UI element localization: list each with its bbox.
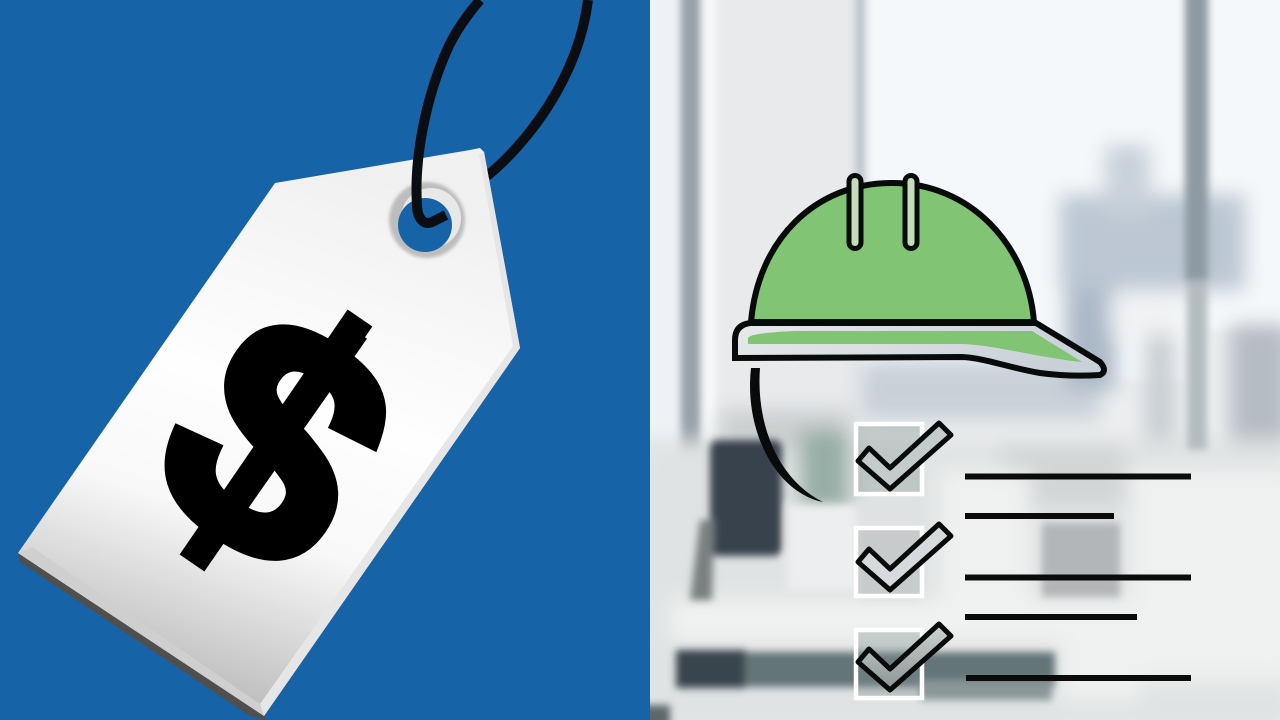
dollar sign: $ (97, 238, 457, 644)
tag string front (417, 0, 480, 223)
tag string behind (487, 0, 588, 176)
checklist lines (965, 474, 1191, 681)
tag body (18, 148, 520, 716)
icon: price tag (18, 0, 588, 720)
panel: blurred office background (640, 0, 1280, 720)
checklist (856, 423, 1191, 698)
panel: blue price background (0, 0, 650, 720)
icon: hard hat (735, 176, 1104, 502)
hat brim (735, 323, 1104, 376)
hat dome (751, 183, 1034, 322)
hat left vent (849, 176, 861, 248)
chin strap (750, 368, 823, 502)
tag eyelet (389, 182, 465, 258)
check item 3 (856, 624, 951, 698)
check item 2 (856, 524, 951, 596)
hat right vent (905, 176, 917, 248)
hat brim green (748, 331, 1082, 362)
tag bevel right (260, 152, 520, 716)
tag bevel bottom (18, 547, 264, 716)
check item 1 (856, 423, 951, 494)
tag edge (18, 553, 266, 720)
